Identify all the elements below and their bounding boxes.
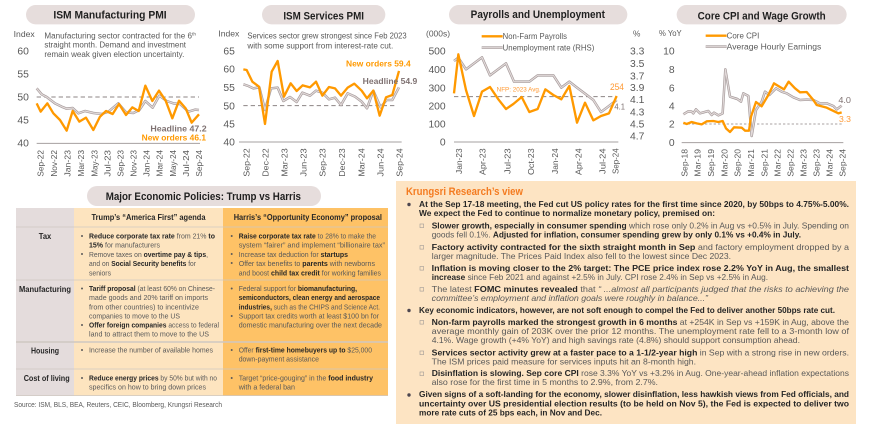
x axis month labels: Sep-24 xyxy=(394,148,404,177)
value labels: Headline 47.2 xyxy=(150,123,207,133)
x axis month labels: Nov-22 xyxy=(49,150,59,177)
x axis month labels: Sep-22 xyxy=(242,148,252,177)
premises list: goods fell 0.1%. Adjusted for inflation, consumer spending grew by only 0.1% vs +0.4% in July. xyxy=(432,230,801,240)
Trump policy text: seniors xyxy=(89,268,111,277)
left y axis labels: 200 xyxy=(428,101,446,112)
Harris policy text: Offer first-time homebuyers up to $25,000 xyxy=(239,346,372,355)
y axis labels: 55 xyxy=(223,83,235,94)
annotation text: straight month. Demand and investment xyxy=(44,41,187,50)
y axis labels: 40 xyxy=(17,139,29,150)
panel: Krungsri Research's view xyxy=(396,181,856,424)
panel: Payrolls and Unemployment chart xyxy=(426,5,645,175)
Trump policy text: Remove taxes on overtime pay & tips, xyxy=(89,250,208,259)
bullets xyxy=(81,235,233,379)
x axis month labels xyxy=(36,150,204,177)
y axis labels: Index xyxy=(14,29,36,39)
legend: Unemployment rate (RHS) xyxy=(503,43,595,52)
heading: ISM Services PMI xyxy=(262,5,385,24)
key indicators heading: Key economic indicators, however, are not soft enough to compel the Fed to deliver another 50bps rate cut. xyxy=(419,305,835,315)
indicators list: Disinflation is slowing. Sep core CPI rose 3.3% YoY vs +3.2% in Aug. One-year-ahead inflation expectations xyxy=(432,368,849,378)
value labels: 254 xyxy=(610,82,624,92)
left y axis labels: 0 xyxy=(440,138,446,149)
y axis labels xyxy=(659,28,682,149)
x axis month labels: Mar-22 xyxy=(772,149,782,177)
x axis month labels: Sep-24 xyxy=(837,149,847,177)
panel: ISM Services PMI chart xyxy=(218,5,418,177)
row labels: Cost of living xyxy=(24,373,70,383)
indicators list: The ISM prices paid measure for services inputs hit an 8-month high. xyxy=(432,356,696,366)
legend: Non-Farm Payrolls xyxy=(503,32,567,41)
y axis labels: 65 xyxy=(223,46,235,57)
Fed outlook conclusion: Given signs of a soft-landing for the economy, slower disinflation, less hawkish views from Fed officials, and xyxy=(419,389,849,399)
line: unemployment rate xyxy=(454,57,617,112)
y axis labels xyxy=(218,29,240,149)
Harris policy text: system “fairer” and implement “billionaire tax” xyxy=(239,240,385,250)
x axis month labels: May-23 xyxy=(89,150,99,177)
x axis month labels: Jan-24 xyxy=(142,150,152,177)
line: headline PMI xyxy=(243,84,399,110)
x axis month labels: Mar-23 xyxy=(76,150,86,177)
legend: Average Hourly Earnings xyxy=(727,42,821,51)
premises list: larger magnitude. The Prices Paid Index also fell to the lowest since Dec 2023. xyxy=(432,251,731,261)
annotation text: th xyxy=(192,32,196,37)
legend xyxy=(706,32,821,51)
column headers: Harris’s “Opportunity Economy” proposal xyxy=(234,212,382,222)
value labels: 3.3 xyxy=(839,114,851,124)
x axis month labels: Sep-21 xyxy=(759,149,769,177)
Trump policy text: and on Social Security benefits for xyxy=(89,259,196,268)
x axis month labels: Apr-23 xyxy=(478,148,488,175)
line: new orders xyxy=(243,61,399,124)
heading: ISM Manufacturing PMI xyxy=(26,5,195,24)
right y axis labels: 4.7 xyxy=(630,131,645,142)
x axis month labels: Dec-22 xyxy=(261,148,271,177)
heading: Major Economic Policies: Major Economic Policies: Trump vs Harris xyxy=(106,191,301,203)
annotation text xyxy=(246,32,407,50)
y axis labels: 60 xyxy=(223,65,235,76)
right y axis labels: 4.3 xyxy=(630,107,645,118)
annotation text: Manufacturing sector contracted for the 6 xyxy=(44,32,190,41)
Harris policy text: domestic manufacturing over the next decade xyxy=(239,321,382,330)
premises list: committee’s employment and inflation goals were roughly in balance...” xyxy=(432,293,709,303)
x axis month labels: Mar-21 xyxy=(746,149,756,177)
annotation text xyxy=(44,32,196,59)
x axis month labels: Jan-23 xyxy=(454,148,464,174)
y axis labels: 6 xyxy=(669,83,675,94)
heading: Payrolls and Unemployment xyxy=(449,5,627,24)
x axis month labels: Jun-23 xyxy=(299,148,309,177)
annotation text: Services sector grew strongest since Feb 2023 xyxy=(247,32,407,41)
right y axis labels: 3.5 xyxy=(630,59,645,70)
Harris policy text: and boost child tax credit for working families xyxy=(239,268,381,277)
x axis month labels: Oct-23 xyxy=(526,148,536,175)
x axis month labels: Jan-23 xyxy=(63,150,73,177)
right y axis labels: % xyxy=(633,29,641,39)
table background columns xyxy=(16,208,388,396)
x axis month labels: Sep-22 xyxy=(36,150,46,177)
Harris policy text xyxy=(238,232,385,391)
right y axis labels: 3.3 xyxy=(630,47,645,58)
Fed meeting summary: We expect the Fed to continue to normalize monetary policy, premised on: xyxy=(419,208,715,218)
Harris policy text: Increase tax deduction for startups xyxy=(239,250,348,259)
left y axis labels: 500 xyxy=(428,47,446,58)
Harris policy text: Federal support for biomanufacturing, xyxy=(239,284,357,293)
x axis month labels xyxy=(454,148,620,175)
y axis labels: 4 xyxy=(669,102,675,113)
Trump policy text: made goods and 20% tariff on imports xyxy=(89,293,208,302)
column headers xyxy=(92,212,382,222)
indicators list: 4.1%. Wage growth (+4% YoY) and high savings rate (4.8%) should support consumption ahead. xyxy=(432,335,800,345)
legend: Core CPI xyxy=(727,32,759,41)
x axis month labels: Mar-24 xyxy=(356,148,366,177)
left y axis labels xyxy=(426,29,450,149)
panel: Major Economic Policies table xyxy=(16,186,388,396)
Trump policy text: Increase the number of available homes xyxy=(89,346,213,355)
panel background xyxy=(396,181,856,424)
heading: Core CPI and Wage Growth xyxy=(677,5,847,24)
Fed outlook conclusion: uncertainty over US presidential election results (to be held on Nov 5), the Fed is expected to deliver two xyxy=(419,398,849,408)
y axis labels: 50 xyxy=(223,101,235,112)
x axis month labels: Mar-23 xyxy=(279,148,289,177)
indicators list: average monthly gain of 203K over the prior 12 months. The unemployment rate fell to a 3-month low of xyxy=(432,326,850,336)
Fed meeting summary xyxy=(419,199,849,218)
Trump policy text: specifics on how to bring down prices xyxy=(89,382,206,391)
x axis month labels: Mar-23 xyxy=(798,149,808,177)
value labels: NFP: 2023 Avg. xyxy=(497,86,541,93)
y axis labels: 10 xyxy=(663,47,675,58)
premises list: Slower growth, especially in consumer spending which rose only 0.2% in Aug vs +0.5% in July. Spending on xyxy=(432,220,849,230)
value labels: New orders 46.1 xyxy=(142,133,206,143)
column headers: Trump’s “America First” agenda xyxy=(92,212,206,222)
premises list xyxy=(432,220,849,303)
x axis month labels: Dec-23 xyxy=(337,148,347,177)
x axis month labels: Sep-20 xyxy=(733,149,743,177)
x axis month labels: Mar-24 xyxy=(824,149,834,177)
bullet markers xyxy=(407,203,411,397)
source note: Source: ISM, BLS, BEA, Reuters, CEIC, Bloomberg, Krungsri Research xyxy=(14,400,222,409)
value labels xyxy=(142,123,207,143)
y axis labels: 55 xyxy=(17,70,29,81)
heading: ISM Services PMI: ISM Services PMI xyxy=(283,10,364,22)
Harris policy text: semiconductors, clean energy and aerospace xyxy=(239,293,380,302)
right y axis labels: 4.5 xyxy=(630,119,645,130)
value labels xyxy=(838,95,851,124)
y axis labels: 8 xyxy=(669,65,675,76)
value labels: New orders 59.4 xyxy=(346,58,411,68)
left y axis labels: 400 xyxy=(428,65,446,76)
x axis month labels: Jan-24 xyxy=(550,148,560,174)
value labels: Headline 54.9 xyxy=(363,76,418,86)
x axis month labels xyxy=(242,148,404,177)
y axis labels: 45 xyxy=(223,120,235,131)
indicators list xyxy=(432,317,850,387)
annotation text: remain weak given election uncertainty. xyxy=(44,50,184,59)
x axis month labels: Jul-23 xyxy=(102,150,112,177)
value labels: 4.1 xyxy=(614,102,625,112)
x axis month labels: Sep-22 xyxy=(785,149,795,177)
Trump policy text: land to attract them to move to the US xyxy=(89,330,209,339)
row labels: Manufacturing xyxy=(19,284,71,294)
heading: Major Economic Policies xyxy=(87,186,321,206)
heading: Krungsri Research's view: Krungsri Research’s view xyxy=(406,186,524,198)
x axis month labels: Mar-20 xyxy=(719,149,729,177)
x axis month labels: Sep-24 xyxy=(194,150,204,177)
premises list: The latest FOMC minutes revealed that “ ...almost all participants judged that the risks to achieving the xyxy=(432,284,849,294)
Trump policy text: Tariff proposal (at least 60% on Chinese- xyxy=(89,284,215,293)
x axis month labels: Sep-19 xyxy=(706,149,716,177)
Trump policy text: Reduce energy prices by 50% but with no xyxy=(89,373,217,382)
Trump policy text: Reduce corporate tax rate from 21% to xyxy=(89,232,215,240)
x axis month labels: Sep-24 xyxy=(610,148,620,174)
y axis labels: Index xyxy=(218,29,240,39)
Trump policy text: 15% for manufacturers xyxy=(89,240,160,250)
Trump policy text: companies to move to the US xyxy=(89,312,180,321)
x axis month labels: Nov-23 xyxy=(129,150,139,177)
y axis labels: 50 xyxy=(17,93,29,104)
Trump policy text: from other countries) to incentivize xyxy=(89,302,199,311)
x axis month labels: Jun-24 xyxy=(376,148,386,177)
y axis labels xyxy=(14,29,36,150)
indicators list: Non-farm payrolls marked the strongest growth in 6 months at +254K in Sep vs +159K in Aug, above the xyxy=(432,317,849,327)
y axis labels: 60 xyxy=(17,47,29,58)
heading: Payrolls and Unemployment: Payrolls and Unemployment xyxy=(471,9,605,21)
row labels: Tax xyxy=(39,231,51,241)
line: new orders xyxy=(37,86,199,131)
legend xyxy=(482,32,595,52)
Harris policy text: industries, such as the CHIPS and Science Act. xyxy=(239,302,380,311)
x axis month labels: Sep-23 xyxy=(318,148,328,177)
Harris policy text: Raise corporate tax rate to 28% to make the xyxy=(239,232,376,240)
x axis month labels: Jul-24 xyxy=(597,148,607,174)
row labels: Housing xyxy=(31,346,59,356)
y axis labels: 40 xyxy=(223,138,235,149)
Harris policy text: with a federal ban xyxy=(238,382,295,391)
left y axis labels: (000s) xyxy=(426,29,450,39)
row labels xyxy=(19,231,71,383)
indicators list: also rose for the first time in 5 months to 2.9%, from 2.7%. xyxy=(432,377,658,387)
line: average hourly earnings xyxy=(683,69,842,136)
Harris policy text: Target “price-gouging” in the food industry xyxy=(239,373,374,382)
premises list: Factory activity contracted for the sixth straight month in Sep and factory employment dropped by a xyxy=(432,242,849,252)
Fed meeting summary: At the Sep 17-18 meeting, the Fed cut US policy rates for the first time since 2020, by 50bps to 4.75%-5.00%. xyxy=(419,199,849,209)
x axis month labels xyxy=(679,149,847,177)
premises list: Inflation is moving closer to the 2% target: The PCE price index rose 2.2% YoY in Aug, the smallest xyxy=(432,263,849,273)
premises list: increase since Feb 2021 and against +2.5% in July. CPI rose 2.4% in Sep vs +2.5% in Aug. xyxy=(432,272,768,282)
y axis labels: 0 xyxy=(669,138,675,149)
Fed outlook conclusion xyxy=(419,389,849,418)
left y axis labels: 300 xyxy=(428,83,446,94)
y axis labels: 2 xyxy=(669,120,675,131)
annotation text: with some support from interest-rate cut. xyxy=(246,41,393,50)
Fed outlook conclusion: more rate cuts of 25 bps each, in Nov and Dec. xyxy=(419,408,602,418)
x axis month labels: Jul-24 xyxy=(181,150,191,177)
heading: Core CPI and Wage Growth: Core CPI and Wage Growth xyxy=(698,10,826,22)
right y axis labels: 3.7 xyxy=(630,71,645,82)
value labels xyxy=(497,82,625,112)
x axis month labels: Apr-24 xyxy=(573,148,583,175)
panel: Core CPI and Wage Growth chart xyxy=(659,5,851,177)
left y axis labels: 100 xyxy=(428,119,446,130)
Harris policy text: Offer tax benefits to parents with newborns xyxy=(239,259,375,268)
line: headline PMI xyxy=(37,88,199,114)
x axis month labels: Sep-23 xyxy=(811,149,821,177)
y axis labels: % YoY xyxy=(659,28,682,38)
indicators list: Services sector activity grew at a faster pace to a 1-1/2-year high in Sep with a strong rise in new orders. xyxy=(432,347,849,357)
right y axis labels: 4.1 xyxy=(630,95,645,106)
checkbox markers xyxy=(420,224,424,376)
x axis month labels: Sep-23 xyxy=(115,150,125,177)
heading: ISM Manufacturing PMI: ISM Manufacturing PMI xyxy=(53,10,167,22)
value labels xyxy=(346,58,418,86)
y axis labels: 45 xyxy=(17,116,29,127)
value labels: 4.0 xyxy=(838,95,851,105)
x axis month labels: May-24 xyxy=(168,150,178,177)
Harris policy text: Support tax credits worth at least $100 bn for xyxy=(239,312,379,321)
x axis month labels: Sep-18 xyxy=(679,149,689,177)
Harris policy text: down-payment assistance xyxy=(239,355,319,364)
line: non-farm payrolls xyxy=(454,54,617,123)
x axis month labels: Jul-23 xyxy=(502,148,512,174)
line: core CPI xyxy=(683,82,842,132)
right y axis labels xyxy=(630,29,645,142)
Trump policy text xyxy=(89,232,219,391)
right y axis labels: 3.9 xyxy=(630,83,645,94)
x axis month labels: Mar-24 xyxy=(155,150,165,177)
panel: ISM Manufacturing PMI chart xyxy=(14,5,207,177)
Trump policy text: Offer foreign companies access to federal xyxy=(89,321,219,330)
x axis month labels: Mar-19 xyxy=(693,149,703,177)
